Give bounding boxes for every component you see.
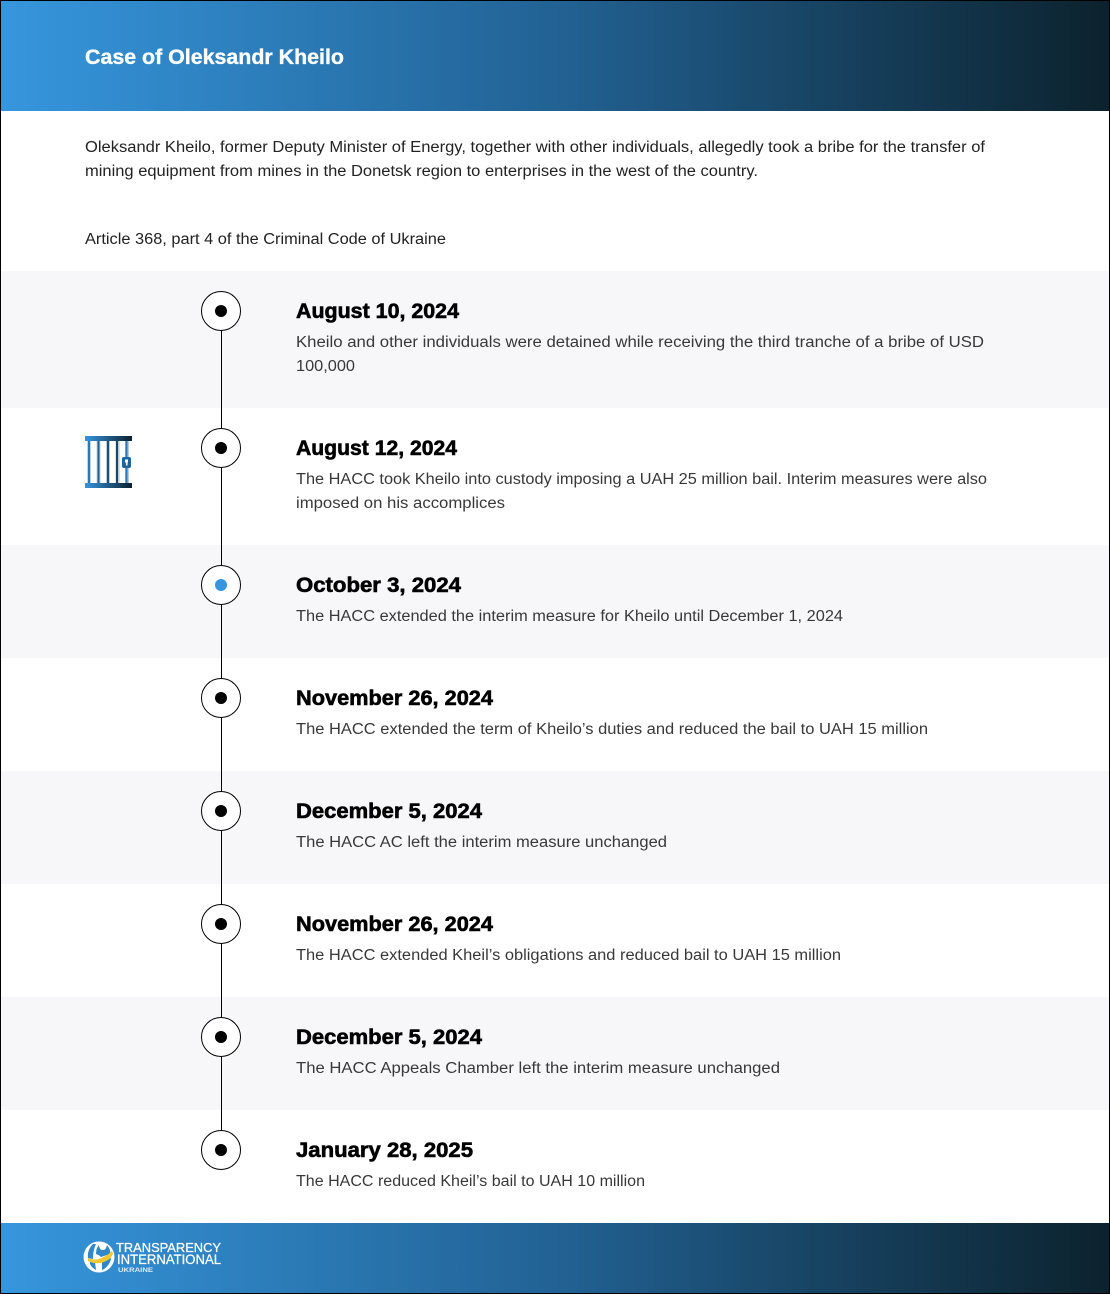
event: October 3, 2024: October 3, 2024 <box>296 574 461 597</box>
footer logo: TRANSPARENCY <box>116 1240 221 1255</box>
event: January 28, 2025 <box>202 1130 645 1190</box>
event: October 3, 2024: The HACC extended the interim measure for Kheilo until December 1, 2024 <box>296 608 843 625</box>
event: November 26, 2024 <box>202 678 928 738</box>
footer logo: INTERNATIONAL <box>117 1252 221 1267</box>
footer logo <box>84 1240 221 1274</box>
event: December 5, 2024: The HACC AC left the interim measure unchanged <box>296 834 667 851</box>
intro text <box>85 139 986 180</box>
event: August 12, 2024: August 12, 2024 <box>296 437 457 460</box>
event: August 10, 2024: August 10, 2024 <box>296 300 459 323</box>
event: August 12, 2024 <box>202 428 987 512</box>
event: December 5, 2024 (second): December 5, 2024 <box>296 1026 482 1049</box>
footer banner <box>0 1223 1110 1294</box>
intro text: Oleksandr Kheilo, former Deputy Minister of Energy, together with other individuals, allegedly took a bribe for the transfer of <box>85 139 986 156</box>
event: December 5, 2024 <box>202 792 667 851</box>
title: Case of Oleksandr Kheilo <box>85 46 344 69</box>
event: October 3, 2024 <box>202 566 843 625</box>
event: November 26, 2024 (second) <box>202 904 841 964</box>
event: August 12, 2024: imposed on his accomplices <box>296 495 505 512</box>
event: January 28, 2025: January 28, 2025 <box>296 1139 473 1162</box>
legal article reference: Article 368, part 4 of the Criminal Code of Ukraine <box>85 231 446 248</box>
event: November 26, 2024 (second): November 26, 2024 <box>296 913 493 936</box>
icon: prison bars <box>85 436 132 488</box>
header banner <box>0 0 1110 111</box>
intro text: mining equipment from mines in the Donetsk region to enterprises in the west of the country. <box>85 163 758 180</box>
event: December 5, 2024 (second) <box>202 1018 780 1077</box>
event: December 5, 2024 (second): The HACC Appeals Chamber left the interim measure unchanged <box>296 1060 780 1077</box>
event: January 28, 2025: The HACC reduced Kheil’s bail to UAH 10 million <box>296 1173 645 1190</box>
event: November 26, 2024: November 26, 2024 <box>296 687 493 710</box>
event: November 26, 2024 (second): The HACC extended Kheil’s obligations and reduced bail to UAH 15 million <box>296 947 841 964</box>
event: August 10, 2024: 100,000 <box>296 358 355 375</box>
event: November 26, 2024: The HACC extended the term of Kheilo’s duties and reduced the bail to UAH 15 million <box>296 721 928 738</box>
footer logo: UKRAINE <box>118 1267 154 1274</box>
panel: row backgrounds <box>0 271 1110 1110</box>
event: December 5, 2024: December 5, 2024 <box>296 800 482 823</box>
event: August 10, 2024 <box>202 292 984 375</box>
event: August 10, 2024: Kheilo and other individuals were detained while receiving the third tranche of a bribe of USD <box>296 334 984 351</box>
timeline line <box>220 311 222 1150</box>
event: August 12, 2024: The HACC took Kheilo into custody imposing a UAH 25 million bail. Interim measures were also <box>296 471 987 488</box>
